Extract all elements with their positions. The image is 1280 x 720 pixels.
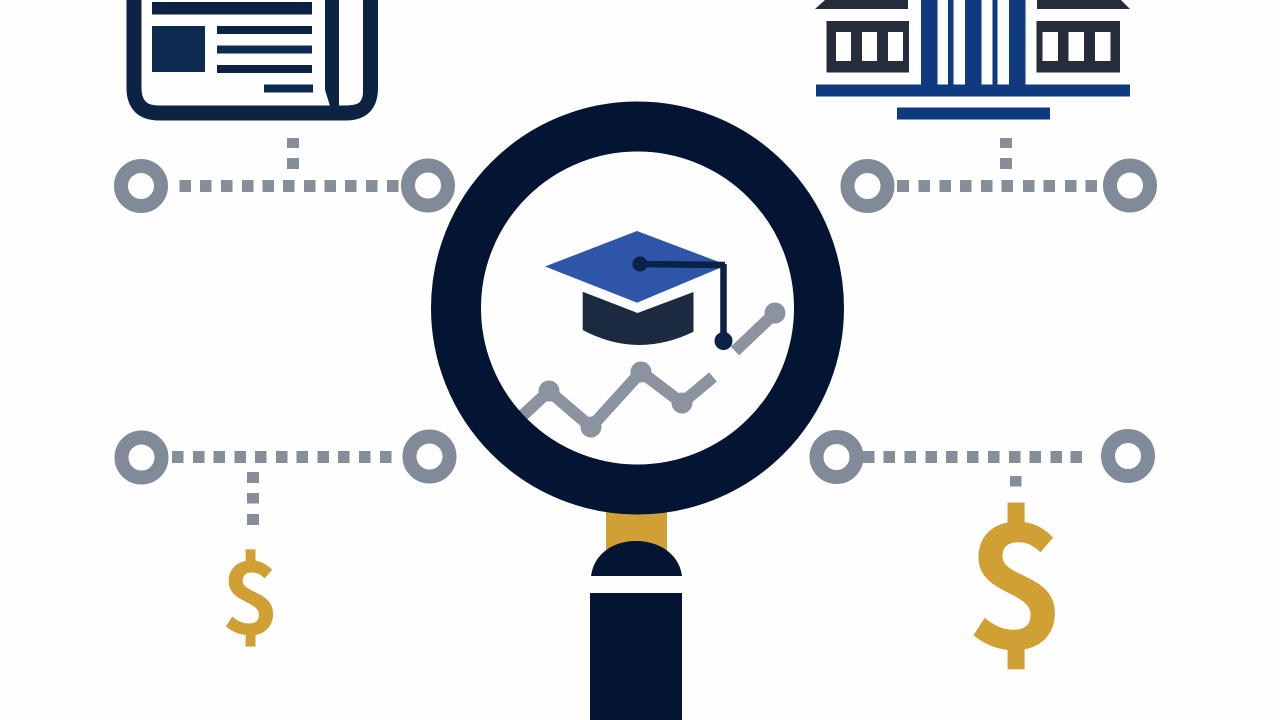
icon: small dollar sign: $ [221, 518, 280, 663]
magnifier collar [591, 541, 682, 576]
icon: newspaper [134, 0, 370, 113]
connector: top right [848, 138, 1150, 206]
icon: magnifying glass [456, 126, 819, 720]
icon: graduation cap [545, 231, 732, 350]
magnifier ring [456, 126, 819, 490]
icon: large dollar sign: $ [965, 448, 1067, 698]
icon: rising trend line [520, 302, 786, 438]
connector: bottom left [122, 436, 450, 525]
icon: institution building [815, 0, 1130, 120]
magnifier handle [590, 593, 682, 720]
magnifier neck [606, 505, 667, 555]
connector: top left [121, 138, 448, 206]
connector: bottom right [816, 436, 1148, 486]
